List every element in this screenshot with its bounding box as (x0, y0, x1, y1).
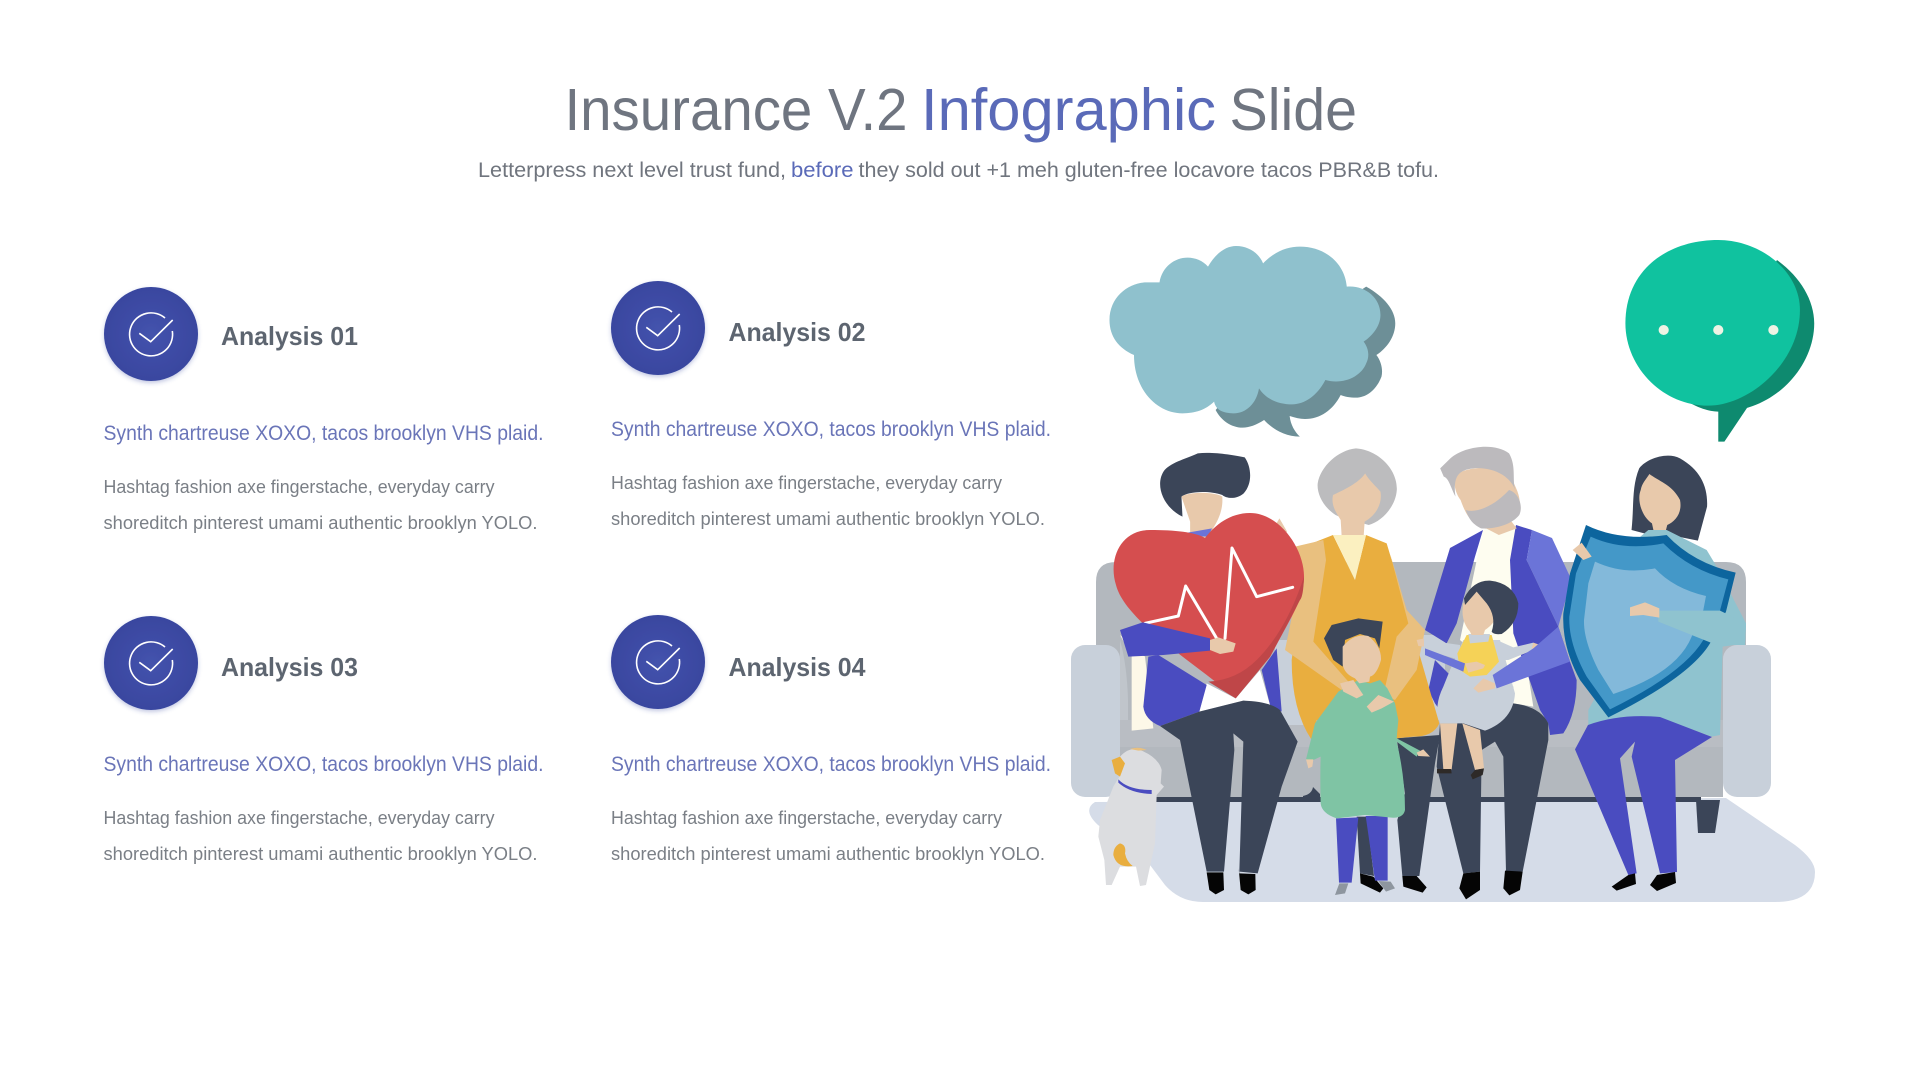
body: analysis 03: Hashtag fashion axe fingerstache, everyday carry (104, 807, 495, 828)
tagline: analysis 01: Synth chartreuse XOXO, tacos brooklyn VHS plaid. (104, 422, 544, 445)
body: analysis 03: shoreditch pinterest umami authentic brooklyn YOLO. (104, 843, 538, 864)
person: toddler girl (1417, 581, 1570, 779)
icon: protective shield (1563, 525, 1736, 717)
dog (1098, 748, 1164, 886)
body: analysis 04: shoreditch pinterest umami authentic brooklyn YOLO. (611, 843, 1045, 864)
icon: heart with heartbeat (1114, 513, 1304, 698)
tagline: analysis 03: Synth chartreuse XOXO, tacos brooklyn VHS plaid. (104, 753, 544, 776)
subtitle (478, 159, 1439, 182)
panel: analysis 04 (611, 615, 1051, 864)
icon: check badge 04 (611, 615, 705, 709)
panel: analysis 03 (104, 616, 544, 864)
body: analysis 04 (611, 807, 1045, 864)
title: Infographic (921, 77, 1216, 143)
icon: check badge 03 (104, 616, 198, 710)
heading: analysis 02: Analysis 02 (728, 317, 866, 347)
icon: check badge 01 (104, 287, 198, 381)
body: analysis 01: Hashtag fashion axe fingerstache, everyday carry (104, 476, 495, 497)
icon: thought cloud (1109, 246, 1395, 437)
sofa (1071, 562, 1771, 833)
body: analysis 01: shoreditch pinterest umami authentic brooklyn YOLO. (104, 512, 538, 533)
subtitle: they sold out +1 meh gluten-free locavore tacos PBR&B tofu. (858, 159, 1439, 182)
subtitle: Letterpress next level trust fund, (478, 159, 786, 182)
body: analysis 03 (104, 807, 538, 864)
body: analysis 04: Hashtag fashion axe fingerstache, everyday carry (611, 807, 1003, 828)
illustration: family on sofa with insurance symbols (1071, 240, 1815, 902)
title (564, 77, 1357, 143)
tagline: analysis 02: Synth chartreuse XOXO, tacos brooklyn VHS plaid. (611, 418, 1051, 441)
body: analysis 02 (611, 472, 1045, 529)
panel: analysis 02 (611, 281, 1051, 529)
title: Slide (1230, 77, 1357, 143)
person: grandmother (1285, 448, 1439, 740)
person: boy (1306, 618, 1430, 895)
ground shadow (1089, 798, 1815, 902)
body: analysis 02: Hashtag fashion axe fingerstache, everyday carry (611, 472, 1003, 493)
panel: analysis 01 (104, 287, 544, 533)
subtitle: before (791, 159, 854, 182)
body: analysis 01 (104, 476, 538, 533)
heading: analysis 03: Analysis 03 (221, 652, 358, 682)
icon: check badge 02 (611, 281, 705, 375)
body: analysis 02: shoreditch pinterest umami authentic brooklyn YOLO. (611, 508, 1045, 529)
tagline: analysis 04: Synth chartreuse XOXO, tacos brooklyn VHS plaid. (611, 753, 1051, 776)
icon: speech bubble (1625, 240, 1814, 442)
person: grandfather (1357, 447, 1577, 899)
heading: analysis 04: Analysis 04 (728, 652, 866, 682)
heading: analysis 01: Analysis 01 (221, 321, 358, 351)
person: father with heart (1114, 453, 1304, 894)
person: mother with shield (1563, 456, 1746, 891)
title: Insurance V.2 (564, 77, 908, 143)
